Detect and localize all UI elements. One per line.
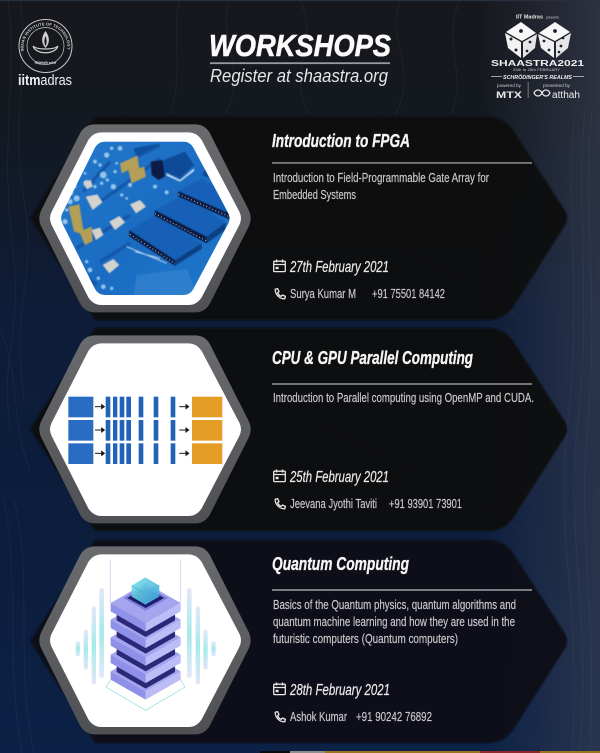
- panel 2 contact: Jeevana Jyothi Taviti: [290, 496, 377, 511]
- panel 1 contact: Surya Kumar M: [290, 286, 356, 301]
- panel 3 description: Basics of the Quantum physics, quantum algorithms and: [273, 597, 516, 612]
- panel 3: Quantum Computing: [30, 540, 567, 743]
- panel 1 background: [30, 117, 567, 320]
- logo: Shaastra 2021: SCHRÖDINGER'S REALMS: [503, 74, 572, 81]
- hexagon frame 3: [39, 546, 251, 734]
- panel 3 contact: +91 90242 76892: [356, 709, 432, 724]
- subtitle: Register at shaastra.org: [210, 65, 389, 86]
- panel 2 heading: CPU & GPU Parallel Computing: [272, 347, 473, 368]
- logo: Shaastra 2021: presented by: [543, 83, 571, 88]
- panel 3 contact: [275, 709, 432, 724]
- title rule: [210, 62, 390, 64]
- panel 2 date: [274, 469, 389, 486]
- logo: Shaastra 2021: atthah: [552, 90, 580, 101]
- panel 3 description: quantum machine learning and how they are used in the: [273, 614, 515, 629]
- panel 1 contact: +91 75501 84142: [372, 286, 445, 301]
- panel 1 contact: [275, 286, 445, 301]
- diagram: parallel computing: [68, 397, 222, 464]
- panel 1: Introduction to FPGA: [30, 117, 567, 320]
- panel 3 date: [274, 682, 390, 699]
- logo: Shaastra 2021: 25th to 28th FEBRUARY: [513, 67, 560, 72]
- panel 3 background: [30, 540, 567, 743]
- panel 1 description: Introduction to Field-Programmable Gate Array for: [273, 170, 489, 185]
- logo: Shaastra 2021: [491, 14, 585, 101]
- panel 2 contact: [275, 496, 462, 511]
- hexagon frame 1: [39, 124, 251, 312]
- logo: Shaastra 2021: SHAASTRA2021: [491, 59, 585, 68]
- quantum cube: [132, 577, 159, 605]
- panel 3 description: futuristic computers (Quantum computers): [273, 631, 458, 646]
- layers: [111, 583, 181, 700]
- logo: Shaastra 2021: powered by: [497, 83, 522, 88]
- logo: IIT Madras seal: सिद्धिर्भवति कर्मजा: [34, 61, 56, 65]
- logo: IIT Madras seal: [18, 19, 72, 73]
- panel 1 description: Embedded Systems: [273, 187, 356, 202]
- logo: Shaastra 2021: MTX: [496, 90, 523, 101]
- logo text: iitmadras: iitmadras: [18, 72, 72, 89]
- panel 3 date: 28th February 2021: [289, 682, 390, 699]
- panel 3 contact: Ashok Kumar: [290, 709, 347, 724]
- panel 2: CPU & GPU Parallel Computing: [30, 328, 567, 531]
- panel 1 heading: Introduction to FPGA: [272, 130, 410, 151]
- illustration: quantum server: [76, 560, 216, 710]
- panel 1 date: 27th February 2021: [289, 259, 389, 276]
- panel 3 heading: Quantum Computing: [272, 553, 409, 574]
- panel 2 date: 25th February 2021: [289, 469, 389, 486]
- panel 1 description: [273, 170, 489, 202]
- image: circuit board: [61, 142, 230, 295]
- hexagon frame 2: [39, 335, 251, 523]
- logo: Shaastra 2021: presents: [546, 15, 559, 19]
- icon: dice: [505, 22, 571, 58]
- panel 2 background: [30, 328, 567, 531]
- logo: Shaastra 2021: IIT Madras: [516, 14, 543, 20]
- title: WORKSHOPS: [209, 28, 391, 63]
- panel 2 contact: +91 93901 73901: [389, 496, 462, 511]
- panel 3 description: [273, 597, 516, 646]
- panel 1 date: [274, 259, 389, 276]
